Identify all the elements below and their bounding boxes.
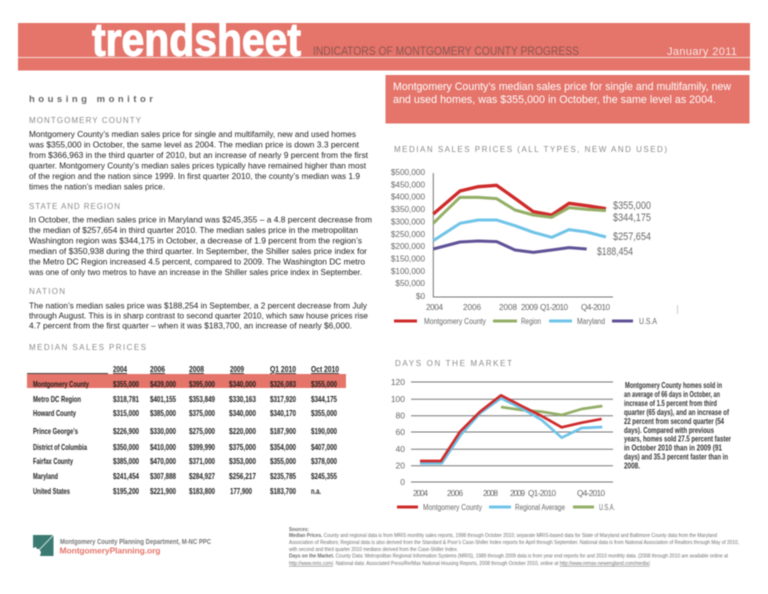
legend: Montgomery County [423, 503, 482, 512]
chart: median sales prices line chart [391, 168, 678, 326]
row: United States: $183,800 [189, 486, 215, 496]
end value labels: $344,175 [613, 212, 651, 224]
row: United States: United States [33, 486, 70, 496]
text block: days on market commentary: 2008. [624, 462, 640, 470]
x axis labels: 2006 [447, 489, 463, 498]
table header row: 2004 [113, 364, 127, 374]
row: Fairfax County: Fairfax County [33, 456, 73, 466]
text block: State and Region: In October, the median sales price in Maryland was $245,355 – a 4.8 percent decrease from [29, 214, 372, 224]
icon: teal square mark [33, 535, 54, 556]
row: Montgomery County: Montgomery County [33, 379, 89, 389]
row: District of Columbia: District of Columbia [33, 442, 87, 452]
logo url: MontgomeryPlanning.org [60, 546, 160, 556]
text block: Montgomery County: MONTGOMERY COUNTY [29, 116, 142, 125]
callout: and used homes, was $355,000 in October, the same level as 2004. [393, 94, 716, 106]
x axis labels: 2004 [426, 303, 443, 312]
x axis labels: 2009 [510, 489, 525, 498]
legend: U.S.A [639, 317, 658, 326]
text block: Nation: NATION [29, 287, 65, 296]
row: Maryland: $245,355 [311, 471, 337, 481]
row: Prince George's: $220,000 [229, 426, 256, 436]
row: Metro DC Region: Metro DC Region [33, 394, 81, 404]
row: Fairfax County: $378,000 [311, 456, 337, 466]
end value labels: $257,654 [613, 231, 651, 243]
row: United States: 177,900 [230, 486, 252, 496]
row: District of Columbia: $354,000 [270, 442, 296, 452]
logo text: Montgomery County Planning Department, M-NC PPC [60, 537, 211, 546]
row: District of Columbia: $410,000 [150, 442, 176, 452]
y axis labels: $350,000 [391, 205, 425, 214]
row: Prince George's [33, 426, 337, 436]
row: Fairfax County: $355,000 [270, 456, 296, 466]
y axis labels: 60 [396, 427, 405, 437]
x axis labels: 2006 [463, 303, 481, 312]
row: Prince George's: Prince George’s [33, 426, 78, 436]
series lines [420, 395, 602, 463]
row: United States: $195,200 [113, 486, 139, 496]
logo: planning department [33, 535, 211, 556]
row: Howard County: $385,000 [150, 408, 176, 418]
text block: days on market commentary: days). Compared with previous [624, 426, 714, 435]
y axis labels: $400,000 [391, 192, 425, 202]
text block: Montgomery County [28, 116, 369, 192]
table header row: Oct 2010 [311, 364, 339, 374]
text block: Nation: 4.7 percent from the first quarter – when it was $183,700, an increase of nearly $6,000. [29, 320, 352, 330]
text block: days on market commentary: years, homes sold 27.5 percent faster [624, 434, 731, 444]
section heading: housing monitor: housing monitor [29, 94, 153, 105]
text block: Montgomery County: was $355,000 in October, the same level as 2004. The median price is down 3.3 percent [28, 140, 360, 150]
y axis labels: 120 [391, 377, 405, 387]
row: Metro DC Region: $330,163 [229, 394, 256, 404]
legend: Maryland [577, 317, 605, 326]
table header row: 2008 [189, 364, 204, 374]
y axis labels: $450,000 [391, 180, 425, 190]
text block: Montgomery County: of the region and the nation since 1999. In first quarter 2010, the county’s median was 1.9 [29, 171, 360, 181]
text block: Nation: through August. This is in sharp contrast to second quarter 2010, which saw house prices rise [29, 310, 368, 320]
sources [289, 527, 739, 567]
y axis labels [391, 377, 405, 487]
y axis labels: 40 [396, 444, 405, 454]
text block: days on market commentary: quarter (65 days), and an increase of [624, 408, 729, 417]
x axis labels: Q1-2010 [540, 303, 568, 312]
text block: State and Region: was one of only two metros to have an increase in the Shiller sales price index in September. [28, 267, 362, 277]
row: Fairfax County: $470,000 [150, 456, 176, 466]
row: Prince George's: $187,900 [270, 426, 296, 436]
y axis labels: $200,000 [391, 242, 425, 251]
table header row: 2006 [150, 364, 165, 374]
callout [386, 75, 750, 124]
table: median sales prices [27, 364, 346, 496]
row: United States: $183,700 [270, 486, 296, 496]
row: Maryland: $235,785 [270, 471, 296, 481]
row: Fairfax County: $371,000 [189, 456, 215, 466]
y axis labels [391, 168, 425, 301]
row: United States: n.a. [311, 486, 321, 496]
sources: Median Prices. County and regional data is from MRIS monthly sales reports, 1998 through October 2010; separate MRIS-based data for State of Maryland and Baltimore County data from the Maryland [289, 533, 717, 539]
row: Howard County: $340,170 [270, 408, 296, 418]
sources: Days on the Market. County Data: Metropolitan Regional Information Systems (MRIS), 1989 through 2009 data is from year end reports for and 2010 monthly data. (2008 through 2010 are available online at [289, 554, 729, 560]
row: District of Columbia: $350,000 [113, 442, 139, 452]
row: District of Columbia: $399,990 [189, 442, 215, 452]
row: Howard County [33, 408, 337, 418]
row: Howard County: $355,000 [311, 408, 337, 418]
y axis labels: $250,000 [391, 230, 425, 239]
row: District of Columbia: $375,000 [229, 442, 256, 452]
x axis labels [426, 303, 610, 312]
text block: days on market commentary: an average of 66 days in October, an [624, 390, 720, 399]
x axis labels: Q4-2010 [581, 303, 610, 312]
y axis labels: $300,000 [391, 218, 425, 226]
row: District of Columbia: $407,000 [311, 442, 337, 452]
text block: days on market commentary: days) and 35.3 percent faster than in [624, 452, 728, 462]
row: District of Columbia [33, 442, 337, 452]
row: Fairfax County: $385,000 [113, 456, 139, 466]
heading: median sales prices table: MEDIAN SALES PRICES [29, 343, 146, 352]
row: Metro DC Region: $353,849 [189, 394, 215, 404]
row: United States [33, 486, 321, 496]
x axis labels: 2008 [483, 489, 498, 498]
table header row [113, 364, 339, 374]
x axis labels: 2008 [499, 303, 517, 312]
row: Metro DC Region: $344,175 [311, 394, 337, 404]
title: trendsheet [92, 14, 301, 66]
row: Montgomery County: $355,000 [311, 379, 337, 389]
x axis labels: Q1-2010 [528, 489, 556, 498]
text block: State and Region: Washington region was $344,175 in October, a decrease of 1.9 percent from the region’s [29, 236, 362, 246]
text block: State and Region: the median of $257,654 in third quarter 2010. The median sales price in the metropolitan [29, 225, 358, 235]
y axis labels: 100 [391, 394, 405, 404]
heading: median sales prices chart: MEDIAN SALES PRICES (ALL TYPES, NEW AND USED) [394, 145, 667, 154]
row: Maryland: $284,927 [189, 471, 215, 481]
row: Metro DC Region [33, 394, 337, 404]
row: Metro DC Region: $401,155 [150, 394, 176, 404]
row: Maryland [33, 471, 337, 481]
row: Montgomery County: $395,000 [189, 379, 215, 389]
text block: days on market commentary: increase of 1.5 percent from third [624, 399, 717, 408]
row: Prince George's: $190,000 [311, 426, 337, 436]
row: Fairfax County [33, 456, 337, 466]
y axis labels: 0 [400, 477, 405, 487]
row: Montgomery County: $439,000 [150, 379, 176, 389]
text block: Nation [29, 287, 368, 330]
end value labels: $355,000 [613, 200, 651, 212]
sources: Sources: [289, 527, 309, 533]
row: Montgomery County [33, 379, 337, 389]
x axis labels: 2004 [413, 489, 428, 498]
row: Montgomery County: $355,000 [113, 379, 139, 389]
legend: Region [521, 317, 541, 326]
text block: State and Region: median of $350,938 during the third quarter. In September, the Shiller sales price index for [29, 246, 367, 256]
row: Howard County: $340,000 [229, 408, 256, 418]
text block: days on market commentary: in October 2010 than in 2009 (91 [624, 444, 722, 452]
sources: http://www.mris.com/. National data: Associated Press/Re/Max National Housing Reports, 2008 through October 2010, online at http://www.remax-newengland.com/media/. [289, 561, 651, 567]
table header row: Q1 2010 [270, 364, 296, 374]
legend: Montgomery County [424, 317, 486, 326]
legend [394, 317, 658, 326]
y axis labels: $100,000 [391, 267, 425, 276]
series lines [433, 185, 606, 252]
text block: days on market commentary [624, 381, 731, 470]
row: Metro DC Region: $318,781 [113, 394, 139, 404]
row: Maryland: $307,888 [150, 471, 176, 481]
end value labels [597, 200, 651, 258]
text block: State and Region: STATE AND REGION [29, 202, 120, 211]
x axis labels [413, 489, 605, 498]
text block: Nation: The nation’s median sales price was $188,254 in September, a 2 percent decrease from July [29, 300, 368, 310]
x axis labels: 2009 [521, 303, 538, 312]
row: Prince George's: $226,900 [113, 426, 139, 436]
legend [397, 503, 615, 512]
header band [18, 14, 750, 70]
end value labels: $188,454 [597, 246, 633, 258]
y axis labels: $500,000 [391, 168, 425, 177]
row: Montgomery County: $340,000 [229, 379, 256, 389]
row: Prince George's: $275,000 [189, 426, 215, 436]
y axis labels: $50,000 [395, 279, 425, 288]
row: Metro DC Region: $317,920 [270, 394, 296, 404]
row: Montgomery County: $326,083 [270, 379, 296, 389]
text block: Montgomery County: times the nation’s median sales price. [29, 182, 165, 192]
x axis labels: Q4-2010 [577, 489, 605, 498]
text block: State and Region [28, 202, 372, 277]
text block: State and Region: the Metro DC Region increased 4.5 percent, compared to 2009. The Washington DC metro [29, 256, 365, 266]
sources: Association of Realtors; Regional data is also derived from the Standard & Poor’s Case-Shiller Index reports for April through September. National data is from National Association of Realtors through May of 2010, [289, 540, 739, 546]
row: Maryland: Maryland [33, 471, 58, 481]
y axis labels: $150,000 [391, 254, 425, 264]
row: Maryland: $256,217 [229, 471, 256, 481]
row: Howard County: $375,000 [189, 408, 215, 418]
chart: days on the market line chart [391, 377, 615, 512]
callout: Montgomery County’s median sales price for single and multifamily, new [393, 81, 731, 93]
row: Maryland: $241,454 [113, 471, 139, 481]
row: Fairfax County: $353,000 [229, 456, 256, 466]
text block: Montgomery County: quarter. Montgomery County’s median sales prices typically have remained higher than most [29, 160, 367, 170]
row: Prince George's: $330,000 [150, 426, 176, 436]
text block: Montgomery County: from $366,963 in the third quarter of 2010, but an increase of nearly 9 percent from the first [29, 150, 369, 160]
y axis labels: 80 [396, 410, 405, 420]
table header row: 2009 [230, 364, 244, 374]
header subtitle: INDICATORS OF MONTGOMERY COUNTY PROGRESS [313, 44, 579, 58]
legend: U.S.A. [599, 503, 615, 512]
sources: with second and third quarter 2010 medians derived from the Case-Shiller Index. [289, 547, 458, 553]
row: United States: $221,900 [150, 486, 176, 496]
y axis labels: 20 [396, 460, 405, 470]
heading: days on the market: DAYS ON THE MARKET [395, 359, 512, 368]
legend: Regional Average [515, 503, 565, 512]
row: Howard County: Howard County [33, 408, 76, 418]
text block: Montgomery County: Montgomery County’s median sales price for single and multifamily, new and used homes [29, 129, 356, 139]
row: Howard County: $315,000 [113, 408, 139, 418]
y axis labels: $0 [416, 292, 425, 301]
text block: days on market commentary: Montgomery County homes sold in [625, 381, 722, 390]
text block: days on market commentary: 22 percent from second quarter (54 [624, 417, 724, 426]
date: January 2011 [667, 46, 737, 58]
